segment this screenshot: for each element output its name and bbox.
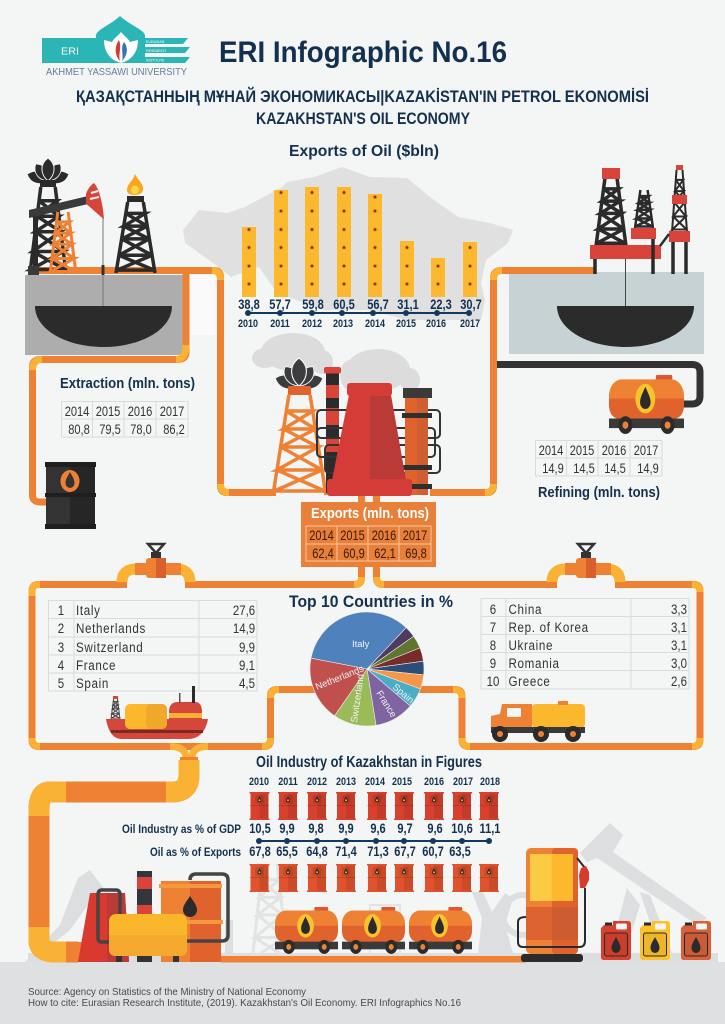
pie chart: top 10 countries: Italy xyxy=(352,639,370,650)
heading: oil industry in figures: Oil Industry of Kazakhstan in Figures xyxy=(256,754,482,771)
table: extraction: 80,8 xyxy=(68,422,90,437)
table: top countries 6-10: 10 xyxy=(487,673,499,689)
bar chart: exports of oil: 2010 xyxy=(238,318,258,330)
row: oil industry as percent of gdp: 10,6 xyxy=(451,821,473,836)
table: extraction: 2015 xyxy=(96,404,120,419)
factory illustration xyxy=(66,871,228,962)
row: oil industry as percent of gdp: 10,5 xyxy=(249,821,271,836)
table: top countries 1-5: 1 xyxy=(58,602,64,618)
table: top countries 6-10: 3,1 xyxy=(671,637,687,653)
row: oil as percent of exports: 71,3 xyxy=(367,844,389,859)
table: refining: 2017 xyxy=(634,443,658,458)
table: top countries 6-10: Rep. of Korea xyxy=(508,619,589,635)
heading: exports of oil: Exports of Oil ($bln) xyxy=(289,143,439,160)
table: refining: 14,5 xyxy=(573,461,595,476)
table: top countries 6-10: 8 xyxy=(490,637,496,653)
map of kazakhstan xyxy=(183,167,513,320)
subtitle english: KAZAKHSTAN'S OIL ECONOMY xyxy=(256,110,470,128)
panel: exports box: 2016 xyxy=(372,528,396,543)
tanker wagons xyxy=(275,907,472,954)
years row: 2018 xyxy=(480,776,500,788)
big pipe xyxy=(39,746,208,952)
table: extraction: 86,2 xyxy=(163,422,185,437)
table: extraction: 2016 xyxy=(128,404,152,419)
table: top countries 6-10: 7 xyxy=(490,619,496,635)
row: oil industry as percent of gdp: 9,6 xyxy=(370,821,386,836)
bar chart: exports of oil: 30,7 xyxy=(460,297,482,312)
subtitle kazakh and turkish: ҚАЗАҚСТАННЫҢ МҰНАЙ ЭКОНОМИКАСЫ|KAZAKİSTAN'IN PETROL EKONOMİSİ xyxy=(76,87,649,106)
table: top countries 1-5: Switzerland xyxy=(76,639,143,655)
panel: exports box: 2014 xyxy=(309,528,334,543)
bar chart: exports of oil: 56,7 xyxy=(367,297,389,312)
years row: 2017 xyxy=(453,776,473,788)
table: top countries 1-5: 27,6 xyxy=(233,602,255,618)
table: refining: 2015 xyxy=(570,443,594,458)
table: extraction xyxy=(62,401,188,437)
row: oil industry as percent of gdp: 9,7 xyxy=(397,821,413,836)
bar chart: exports of oil: 2013 xyxy=(333,318,353,330)
table: top countries 6-10: 6 xyxy=(490,601,496,617)
table: top countries 6-10: 3,0 xyxy=(671,655,687,671)
source and citation: Source: Agency on Statistics of the Ministry of National Economy xyxy=(28,986,307,998)
row: oil as percent of exports: Oil as % of Exports xyxy=(150,845,241,859)
title: ERI Infographic No.16 xyxy=(219,36,507,69)
bar chart: exports of oil: 2015 xyxy=(396,318,416,330)
oil pool right xyxy=(557,306,694,347)
row: oil as percent of exports xyxy=(150,844,471,859)
logo: ERI xyxy=(61,46,79,58)
panel: exports box: 69,8 xyxy=(405,546,427,561)
valve right xyxy=(552,544,620,582)
pie chart: top 10 countries: Spain xyxy=(390,682,416,706)
table: top countries 1-5 xyxy=(48,600,257,691)
bar chart: exports of oil xyxy=(238,187,482,330)
bar chart: exports of oil: 31,1 xyxy=(397,297,419,312)
heading: refining: Refining (mln. tons) xyxy=(538,485,660,501)
source and citation xyxy=(28,986,461,1009)
pie chart: top 10 countries: Switzerland xyxy=(349,673,367,723)
years row: 2014 xyxy=(365,776,385,788)
table: top countries 6-10: Greece xyxy=(508,673,551,689)
icon: black oil barrel xyxy=(45,462,96,529)
table: top countries 1-5: 14,9 xyxy=(233,620,255,636)
row: oil industry as percent of gdp: 9,6 xyxy=(427,821,443,836)
bar chart: exports of oil: 2017 xyxy=(460,318,480,330)
table: top countries 6-10: 2,6 xyxy=(671,673,687,689)
table: refining: 2016 xyxy=(602,443,626,458)
heading: extraction: Extraction (mln. tons) xyxy=(60,376,195,392)
table: refining: 14,9 xyxy=(542,461,564,476)
table: top countries 6-10: 3,3 xyxy=(671,601,687,617)
years row: 2013 xyxy=(336,776,356,788)
table: extraction: 2014 xyxy=(65,404,89,419)
derricks and pump jack xyxy=(25,158,155,306)
valve left xyxy=(122,544,190,582)
row: oil industry as percent of gdp: 9,9 xyxy=(279,821,295,836)
pie chart: top 10 countries: France xyxy=(373,689,398,720)
barrels row: exports xyxy=(250,864,499,892)
panel: exports box xyxy=(301,502,436,567)
table: refining: 2014 xyxy=(539,443,563,458)
background pumpjack silhouettes xyxy=(25,823,718,962)
ground footer xyxy=(0,962,725,1024)
table: top countries 1-5: Spain xyxy=(76,675,109,691)
table: top countries 6-10: Romania xyxy=(508,655,560,671)
table: extraction: 79,5 xyxy=(99,422,121,437)
years row: 2011 xyxy=(278,776,298,788)
orange feed pipe xyxy=(221,956,526,962)
icon: oil ship xyxy=(106,686,208,739)
pipes: export network xyxy=(32,560,700,746)
table: refining: 14,9 xyxy=(637,461,659,476)
refinery illustration xyxy=(252,333,440,496)
oil pool left xyxy=(35,306,172,347)
bar chart: exports of oil: 2012 xyxy=(302,318,322,330)
offshore platform xyxy=(590,165,690,306)
row: oil as percent of exports: 60,7 xyxy=(422,844,444,859)
bar chart: exports of oil: 38,8 xyxy=(238,297,260,312)
table: top countries 1-5: France xyxy=(76,657,116,673)
years row: 2012 xyxy=(307,776,327,788)
bar chart: exports of oil: 2014 xyxy=(365,318,385,330)
row: oil industry as percent of gdp: 11,1 xyxy=(480,821,501,836)
table: top countries 1-5: Netherlands xyxy=(76,620,146,636)
bar chart: exports of oil: 59,8 xyxy=(302,297,324,312)
row: oil as percent of exports: 71,4 xyxy=(335,844,357,859)
table: refining xyxy=(536,440,662,476)
logo: INSTITUTE xyxy=(146,58,165,62)
fuel pump xyxy=(518,848,589,962)
left ground xyxy=(25,275,183,355)
table: top countries 1-5: 4 xyxy=(58,657,64,673)
heading: top 10 countries: Top 10 Countries in % xyxy=(289,593,453,611)
table: top countries 6-10: Ukraine xyxy=(508,637,553,653)
row: oil industry as percent of gdp: 9,8 xyxy=(308,821,324,836)
pie chart: top 10 countries xyxy=(310,612,424,726)
panel: exports box: Exports (mln. tons) xyxy=(311,506,429,522)
table: top countries 1-5: 4,5 xyxy=(239,675,255,691)
icon: oil truck xyxy=(491,701,585,742)
row: oil industry as percent of gdp: Oil Industry as % of GDP xyxy=(122,822,241,836)
years row: 2016 xyxy=(424,776,444,788)
table: top countries 1-5: 5 xyxy=(58,675,64,691)
table: top countries 6-10 xyxy=(481,598,689,689)
table: extraction: 2017 xyxy=(160,404,184,419)
pipes: upper network xyxy=(32,270,595,510)
logo: EURASIAN xyxy=(146,40,165,44)
table: top countries 6-10: 3,1 xyxy=(671,619,687,635)
logo: AKHMET YASSAWI UNIVERSITY xyxy=(46,66,187,78)
years row: 2010 xyxy=(249,776,269,788)
row: oil as percent of exports: 64,8 xyxy=(306,844,328,859)
bar chart: exports of oil: 57,7 xyxy=(269,297,291,312)
panel: exports box: 2015 xyxy=(340,528,365,543)
table: top countries 1-5: 2 xyxy=(58,620,64,636)
source and citation: How to cite: Eurasian Research Institute, (2019). Kazakhstan's Oil Economy. ERI Infographics No.16 xyxy=(28,997,461,1009)
logo: RESEARCH xyxy=(146,49,166,53)
timeline xyxy=(256,838,492,844)
right ground xyxy=(509,272,704,354)
panel: exports box: 60,9 xyxy=(343,546,365,561)
years row xyxy=(249,776,500,788)
years row: 2015 xyxy=(392,776,412,788)
bar chart: exports of oil: 60,5 xyxy=(333,297,355,312)
bar chart: exports of oil: 22,3 xyxy=(430,297,452,312)
table: refining: 14,5 xyxy=(604,461,626,476)
row: oil as percent of exports: 67,8 xyxy=(249,844,271,859)
table: top countries 6-10: China xyxy=(508,601,542,617)
table: extraction: 78,0 xyxy=(130,422,152,437)
jerry cans xyxy=(601,921,711,960)
panel: exports box: 62,4 xyxy=(312,546,334,561)
table: top countries 1-5: 9,9 xyxy=(239,639,255,655)
panel: exports box: 2017 xyxy=(403,528,427,543)
panel: exports box: 62,1 xyxy=(374,546,396,561)
tanker truck: refining xyxy=(609,375,684,434)
bar chart: exports of oil: 2011 xyxy=(270,318,290,330)
table: top countries 1-5: 9,1 xyxy=(239,657,255,673)
row: oil as percent of exports: 63,5 xyxy=(449,844,471,859)
row: oil as percent of exports: 67,7 xyxy=(394,844,416,859)
row: oil industry as percent of gdp: 9,9 xyxy=(338,821,354,836)
row: oil as percent of exports: 65,5 xyxy=(276,844,298,859)
table: top countries 1-5: Italy xyxy=(76,602,101,618)
pie chart: top 10 countries: Netherlands xyxy=(314,663,366,693)
black pipe to tanker xyxy=(497,364,700,404)
logo xyxy=(42,16,190,78)
bar chart: exports of oil: 2016 xyxy=(426,318,446,330)
barrels row: gdp xyxy=(250,792,499,820)
table: top countries 1-5: 3 xyxy=(58,639,64,655)
table: top countries 6-10: 9 xyxy=(490,655,496,671)
row: oil industry as percent of gdp xyxy=(122,821,501,836)
